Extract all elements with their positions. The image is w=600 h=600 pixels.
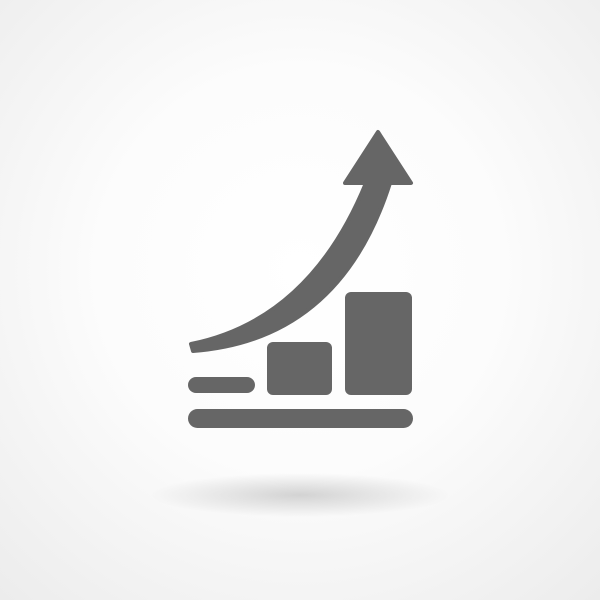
short line <box>188 377 255 393</box>
shadow <box>150 473 450 517</box>
arrow: rising curve <box>191 132 411 351</box>
base line <box>188 409 413 428</box>
bar: tall <box>345 292 412 395</box>
bar: medium <box>267 342 332 395</box>
